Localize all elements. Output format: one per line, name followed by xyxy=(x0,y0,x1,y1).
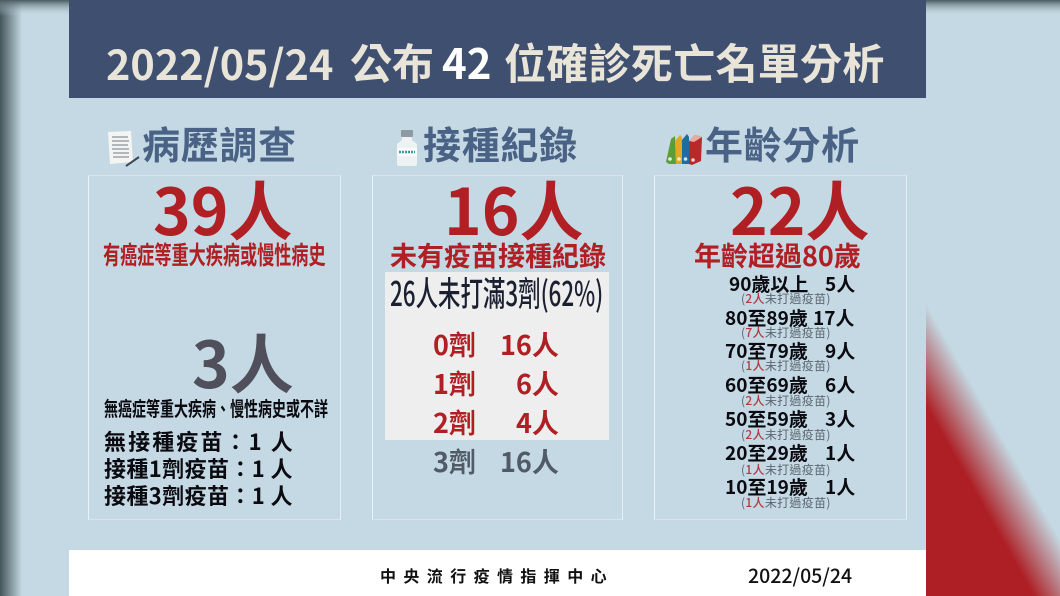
dose row 2: 2劑 xyxy=(433,402,476,441)
dose row 0: 0劑 xyxy=(433,324,476,363)
age row 70-79: 70至79歲 xyxy=(725,337,808,364)
age count 10-19: 1人 xyxy=(825,473,855,500)
age count 70-79: 9人 xyxy=(825,337,855,364)
footer: agency: 中央流行疫情指揮中心 xyxy=(380,563,614,587)
heading: medical history: 病歷調查 xyxy=(142,115,297,170)
caption: over 80: 年齡超過80歲 xyxy=(694,235,861,274)
icon: document xyxy=(108,131,140,167)
stat: 16 people: 16人 xyxy=(444,162,584,254)
header band xyxy=(69,0,926,98)
stat: 22 people: 22人 xyxy=(730,162,870,254)
note 80-89: (7人未打過疫苗) xyxy=(741,324,831,341)
note 90+: (2人未打過疫苗) xyxy=(741,290,831,307)
line: three doses: 接種3劑疫苗：1 人 xyxy=(104,479,293,511)
line: no vaccine: 無接種疫苗：1 人 xyxy=(104,425,295,457)
title xyxy=(106,31,885,92)
title: 公布 xyxy=(350,31,434,92)
age count 80-89: 17人 xyxy=(813,304,854,331)
dose row 3: 3劑 xyxy=(433,441,476,480)
stat: 3 people: 3人 xyxy=(192,315,294,407)
age row 50-59: 50至59歲 xyxy=(725,405,808,432)
footer: date: 2022/05/24 xyxy=(748,560,852,589)
footer band xyxy=(69,550,926,596)
note 50-59: (2人未打過疫苗) xyxy=(741,426,831,443)
title: 42 xyxy=(442,31,492,92)
subheading: 26 not fully vaccinated: 26人未打滿3劑(62%) xyxy=(390,267,603,316)
title: 位確診死亡名單分析 xyxy=(504,31,885,92)
caption: no vaccination record: 未有疫苗接種紀錄 xyxy=(390,235,606,274)
panel: age analysis xyxy=(654,175,907,520)
count row 0: 16人 xyxy=(500,324,559,363)
panel: vaccination record xyxy=(372,175,623,520)
dose row 1: 1劑 xyxy=(433,363,476,402)
note 20-29: (1人未打過疫苗) xyxy=(741,461,831,478)
panel: medical history xyxy=(88,175,341,520)
age count 50-59: 3人 xyxy=(825,405,855,432)
content sheet xyxy=(69,0,926,550)
icon: books xyxy=(666,134,702,165)
age row 80-89: 80至89歲 xyxy=(725,304,808,331)
age count 60-69: 6人 xyxy=(825,371,855,398)
note 10-19: (1人未打過疫苗) xyxy=(741,494,831,511)
line: one dose: 接種1劑疫苗：1 人 xyxy=(104,452,293,484)
age count 20-29: 1人 xyxy=(825,439,855,466)
count row 3: 16人 xyxy=(500,441,559,480)
age count 90+: 5人 xyxy=(825,270,855,297)
age row 90+: 90歲以上 xyxy=(729,270,808,297)
icon: vaccine bottle xyxy=(397,130,417,166)
title: 2022/05/24 xyxy=(106,32,333,92)
heading: vaccination record: 接種紀錄 xyxy=(423,115,578,170)
count row 1: 6人 xyxy=(516,363,559,402)
dose highlight panel xyxy=(385,272,609,440)
age row 60-69: 60至69歲 xyxy=(725,371,808,398)
note 70-79: (1人未打過疫苗) xyxy=(741,357,831,374)
heading: age analysis: 年齡分析 xyxy=(705,115,860,170)
age row 20-29: 20至29歲 xyxy=(725,439,808,466)
count row 2: 4人 xyxy=(516,402,559,441)
caption: without illness: 無癌症等重大疾病、慢性病史或不詳 xyxy=(104,393,328,422)
stat: 39 people: 39人 xyxy=(153,162,293,254)
age row 10-19: 10至19歲 xyxy=(725,473,808,500)
note 60-69: (2人未打過疫苗) xyxy=(741,392,831,409)
caption: with illness: 有癌症等重大疾病或慢性病史 xyxy=(103,236,326,272)
